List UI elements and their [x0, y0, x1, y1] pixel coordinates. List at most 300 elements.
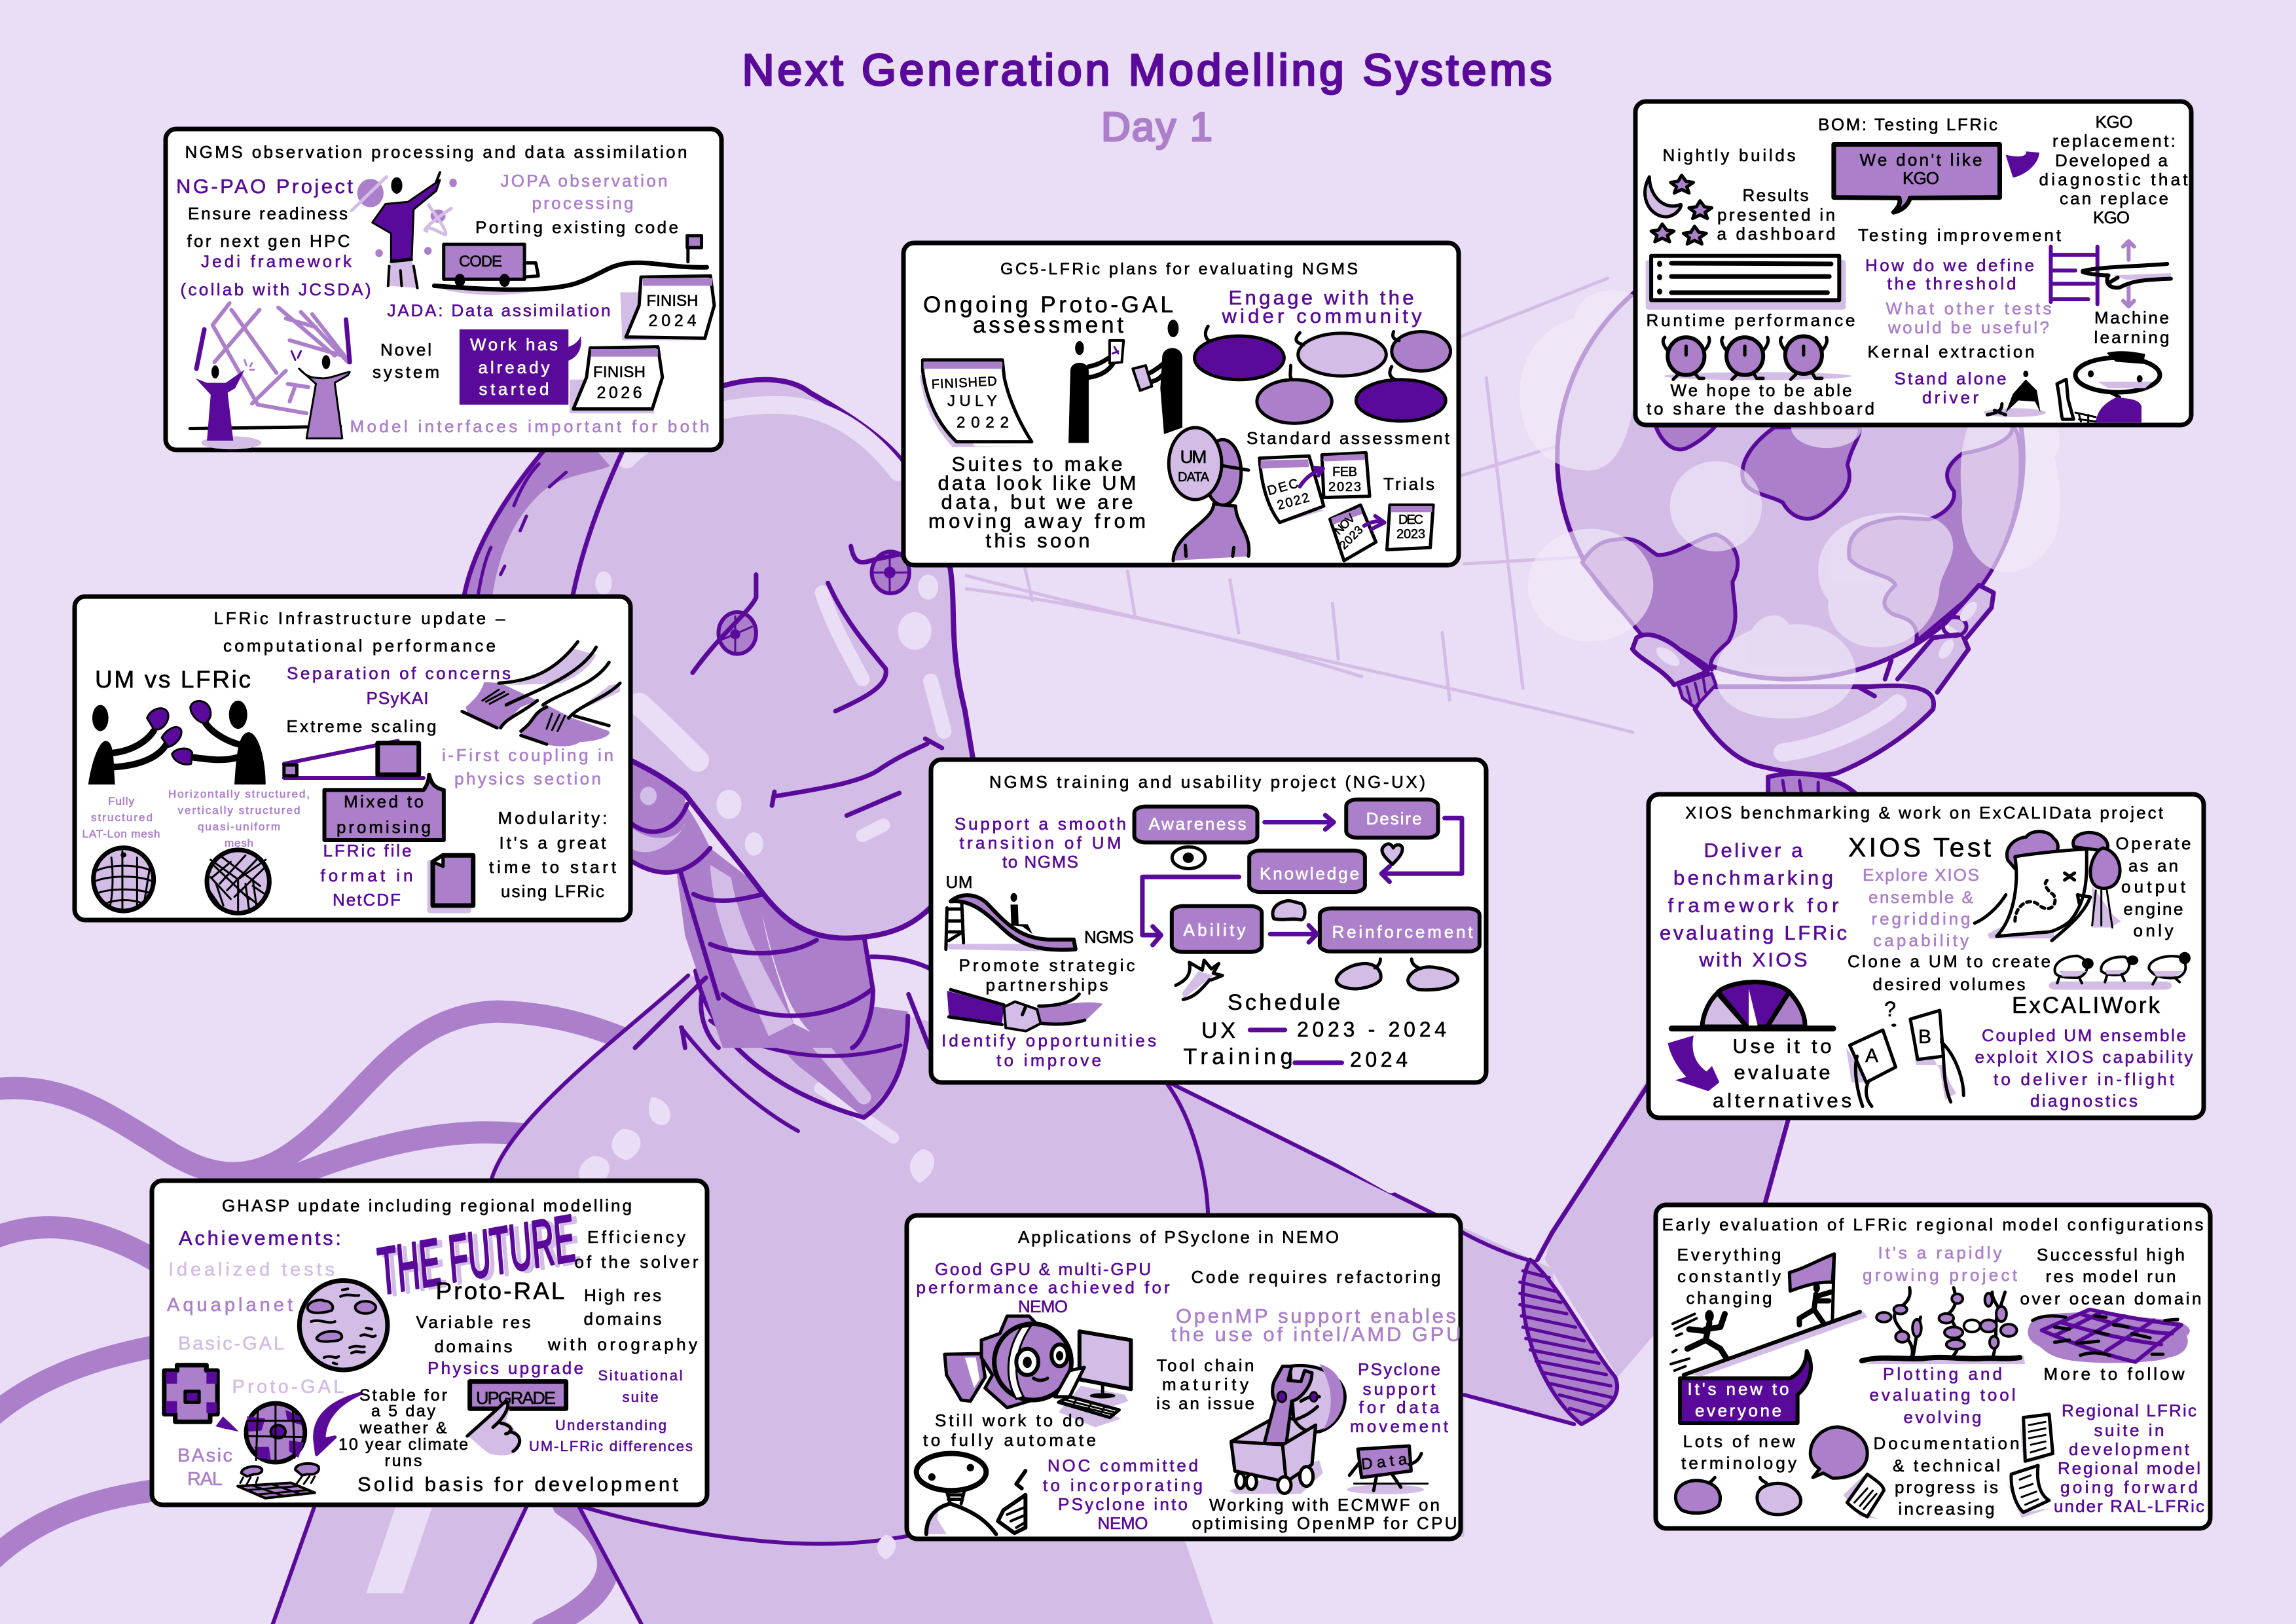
text: KGO replacement: diagnostic that [2039, 170, 2188, 189]
text: UM data mask [1178, 447, 1210, 485]
illustrations: fish, monitor, wrench, robot [917, 1316, 1428, 1534]
box: awareness [1135, 807, 1258, 843]
text: stable runs: runs [385, 1452, 422, 1470]
earth sphere [1558, 236, 2023, 679]
arrows between stages [1142, 815, 1462, 945]
text: calendar labels: 2022 [1275, 490, 1311, 513]
ear [627, 760, 710, 872]
icon: wizards [190, 320, 350, 449]
text: clone UM: Clone a UM to create [1848, 951, 2050, 971]
text: physics upgrade: Understanding [555, 1417, 666, 1433]
text: KGO replacement: KGO [2093, 208, 2130, 227]
text: successful run: res model run [2045, 1266, 2176, 1286]
text: suites [928, 452, 1146, 552]
text: calendar labels: FINISHED [931, 374, 997, 392]
text: testing improvement: the threshold [1887, 274, 2016, 293]
icon: two people [1068, 320, 1182, 443]
text: JOPA [475, 171, 678, 237]
text: new to everyone [1688, 1379, 1789, 1420]
text: achievements: Aquaplanet [167, 1295, 293, 1316]
text: stable runs [338, 1386, 468, 1470]
text: regional suite: going forward [2060, 1477, 2198, 1497]
text: output engine: Operate [2116, 834, 2191, 853]
text: upgrade button label: UPGRADE [476, 1388, 556, 1408]
text: standard assessment: Standard assessment [1247, 428, 1450, 448]
background: wavy cables [0, 1012, 703, 1624]
heading: computational performance [223, 636, 496, 655]
text: support transition [955, 814, 1126, 872]
icon: wrench and cart [1230, 1364, 1345, 1494]
text: everything changing [1677, 1245, 1781, 1308]
panel: early evaluation of regional model [1656, 1205, 2210, 1528]
text: everything changing: constantly [1677, 1266, 1781, 1286]
panel frame [166, 129, 721, 450]
text: ongoing assessment [923, 292, 1173, 338]
icon: sheep [2049, 952, 2191, 989]
text: truck and calendar labels: CODE [459, 253, 502, 270]
icon: boxing figures [88, 701, 266, 784]
text: KGO replacement: replacement: [2052, 131, 2176, 151]
text: machine learning [2094, 308, 2170, 347]
text: ECMWF: optimising OpenMP for CPU [1192, 1513, 1457, 1533]
text: modularity: Modularity: [498, 808, 608, 828]
text: documentation: & technical [1893, 1456, 2000, 1475]
text: horizontally structured mesh: vertically structured [178, 804, 300, 817]
text: NG-PAO project [176, 175, 371, 299]
panel: GHASP update [152, 1181, 707, 1505]
text: nightly builds: presented in [1717, 205, 1835, 225]
text: JOPA: JOPA observation [500, 171, 668, 191]
text: XIOS test: capability [1873, 931, 1969, 950]
text: XIOS test: ensemble & [1868, 887, 1973, 907]
callout: mixed to promising [325, 775, 444, 840]
text: output engine [2116, 834, 2191, 940]
text: card labels [1865, 997, 1931, 1067]
text: calendar labels: 2023 [1396, 527, 1425, 542]
panel frame [903, 243, 1459, 565]
icon: handshake [947, 989, 1103, 1031]
text: stable runs: Stable for [359, 1386, 447, 1405]
text: JADA and novel system: started [479, 379, 549, 399]
icon: runners on slope [1671, 1254, 1867, 1376]
text: speech bubble: We don't like [1859, 150, 1982, 170]
text: NG-PAO project: for next gen HPC [187, 231, 350, 251]
text: NOC committed [1043, 1456, 1203, 1533]
face: eyes [693, 546, 909, 673]
text: tool chain [1156, 1356, 1254, 1413]
panel: GHASP update: THE FUTURE [376, 1204, 587, 1310]
text: support transition: to NGMS [1002, 852, 1078, 872]
text: proto-RAL: domains [435, 1337, 512, 1356]
text: runtime performance: Runtime performance [1646, 310, 1855, 330]
text: successful run [2020, 1245, 2201, 1308]
text: speech bubble: KGO [1903, 168, 1939, 188]
icon: community bubbles [1195, 326, 1451, 423]
text: KGO replacement: Developed a [2055, 151, 2168, 170]
text: i-first coupling: i-First coupling in [442, 745, 613, 765]
text: file format: LFRic file [323, 841, 411, 860]
icon: trees [2007, 832, 2122, 927]
panel frame [907, 1215, 1461, 1539]
text: still work to do: to fully automate [923, 1430, 1096, 1450]
text: still work to do [923, 1411, 1096, 1450]
box: desire [1346, 800, 1438, 838]
text: growing project: growing project [1863, 1265, 2018, 1285]
text: documentation: increasing [1899, 1499, 1994, 1519]
box: reinforcement [1320, 908, 1480, 951]
text: calendar labels: JULY [947, 392, 997, 410]
text: i-first coupling [442, 745, 613, 788]
icon: ocean grid [2028, 1310, 2190, 1363]
text: stable runs: weather & [359, 1419, 447, 1437]
palm highlight [1783, 703, 1897, 752]
text: separation of concerns: PSyKAI [367, 688, 428, 708]
neck [635, 848, 932, 1048]
icon: apples [1675, 1477, 1801, 1515]
text: separation of concerns: Extreme scaling [287, 716, 436, 736]
text: engage community: wider community [1222, 304, 1422, 327]
text: data movement [1350, 1359, 1449, 1436]
text: card labels: A [1865, 1045, 1878, 1067]
text: evaluate alternatives: Use it to [1732, 1035, 1832, 1058]
panel: LFRic infrastructure update [75, 597, 630, 920]
text: modularity [489, 808, 617, 901]
text: ongoing assessment: Ongoing Proto-GAL [923, 292, 1173, 318]
text: testing improvement [1858, 225, 2062, 407]
text: schedule [1184, 990, 1446, 1071]
text: machine learning: Machine [2094, 308, 2169, 327]
icon: brain [1273, 901, 1305, 920]
text: stage labels [1148, 809, 1473, 942]
text: file format: NetCDF [333, 890, 401, 910]
text: UM data mask: DATA [1178, 470, 1210, 485]
text: new to everyone: everyone [1695, 1401, 1781, 1420]
text: GPU performance: NEMO [1018, 1297, 1068, 1316]
text: growing project [1863, 1243, 2018, 1285]
text: OpenMP support: the use of intel/AMD GPU [1171, 1323, 1461, 1346]
text: successful run: over ocean domain [2020, 1289, 2201, 1308]
text: data label: Data [1360, 1450, 1408, 1473]
text: testing improvement: Kernal extraction [1867, 342, 2035, 361]
text: output engine: output [2121, 877, 2186, 896]
text: KGO replacement [2039, 112, 2188, 227]
text: calendar labels: DEC [1398, 513, 1423, 527]
text: output engine: engine [2124, 899, 2183, 919]
wrist [1768, 774, 1858, 796]
text: runtime performance: We hope to be able [1671, 380, 1851, 400]
text: horizontally structured mesh: Horizontally structured, [168, 788, 310, 800]
icon: file [428, 855, 473, 913]
text: JOPA: processing [532, 193, 634, 213]
text: GPU performance: Good GPU & multi-GPU [935, 1259, 1151, 1279]
subtitle: Day 1 [1101, 105, 1212, 150]
text: model interfaces: Model interfaces important for both [350, 416, 710, 436]
icon: waving robot [917, 1454, 1026, 1534]
icon: hands tearing paper [462, 642, 620, 747]
text: achievements: RAL [187, 1469, 223, 1490]
text: physics upgrade [428, 1358, 693, 1454]
text: KGO replacement: can replace [2060, 189, 2168, 208]
text: successful run: Successful high [2037, 1245, 2185, 1264]
text: evaluate alternatives: evaluate [1734, 1061, 1831, 1084]
text: fully structured mesh [82, 795, 160, 840]
text: achievements: Achievements: [179, 1227, 341, 1249]
text: regional suite: Regional model [2058, 1458, 2200, 1478]
text: support transition: transition of UM [960, 833, 1121, 853]
text: truck and calendar labels: FINISH [593, 363, 646, 381]
text: tool chain: maturity [1162, 1375, 1248, 1394]
text: truck and calendar labels: FINISH [647, 292, 698, 310]
text: NG-PAO project: Ensure readiness [188, 204, 348, 223]
icon: threshold ladder and pointing hand [2050, 241, 2171, 306]
text: documentation [1874, 1433, 2019, 1519]
text: JADA and novel system: Work has [470, 335, 558, 354]
text: ECMWF [1192, 1495, 1457, 1533]
text: growing project: It's a rapidly [1878, 1243, 2002, 1263]
text: JADA and novel system [373, 301, 610, 399]
panel frame [1649, 794, 2204, 1118]
icon: astronomer [373, 172, 440, 288]
box: knowledge [1249, 851, 1365, 892]
text: separation of concerns: Separation of concerns [287, 663, 511, 683]
text: deliver benchmarking: benchmarking [1673, 866, 1833, 889]
icon: computer [1059, 1331, 1131, 1428]
text: proto-RAL [416, 1278, 697, 1356]
text: machine learning: learning [2094, 327, 2170, 347]
icon: rain clouds and grid [238, 1464, 319, 1498]
text: regional suite [2054, 1401, 2204, 1516]
text: testing improvement: driver [1922, 388, 1978, 407]
text: achievements: Idealized tests [168, 1259, 335, 1280]
text: modularity: It's a great [499, 833, 606, 853]
text: truck and calendar labels: 2024 [648, 312, 697, 330]
text: schedule: 2024 [1350, 1048, 1408, 1071]
text: physics upgrade: Physics upgrade [428, 1358, 583, 1378]
globe in hand [1520, 236, 2060, 796]
text: runtime performance: to share the dashboard [1647, 399, 1874, 418]
text: nightly builds: Nightly builds [1663, 145, 1795, 165]
text: UM vs LFRic: UM vs LFRic [95, 666, 251, 693]
text: new to everyone: It's new to [1688, 1379, 1789, 1399]
text: proto-RAL: Variable res [416, 1312, 530, 1332]
text: testing improvement: Stand alone [1895, 369, 2006, 388]
icon: calendars [570, 276, 714, 413]
text: engage community [1222, 286, 1422, 327]
text: mixed to promising: Mixed to [344, 792, 424, 811]
text: separation of concerns [287, 663, 511, 736]
text: standard assessment: Trials [1383, 474, 1434, 494]
text: NOC committed: PSyclone into [1058, 1494, 1188, 1514]
text: proto-RAL: Proto-RAL [436, 1278, 564, 1304]
heading: BOM: Testing LFRic [1818, 115, 1997, 134]
icon: cards A and B [1846, 1010, 1963, 1107]
text: calendar labels: DEC [1266, 476, 1300, 498]
callout: it's new to everyone [1680, 1351, 1811, 1423]
text: terminology: Lots of new [1683, 1431, 1795, 1451]
text: calendar labels: 2023 [1337, 523, 1366, 552]
text: ExCALIWork: ExCALIWork [2012, 993, 2160, 1018]
icon: data character [1347, 1446, 1428, 1494]
text: NOC committed: NOC committed [1048, 1456, 1198, 1475]
text: modularity: time to start [489, 857, 617, 877]
text: JADA and novel system: already [478, 358, 550, 377]
text: stable runs: a 5 day [371, 1402, 436, 1420]
text: the future [371, 1202, 587, 1310]
text: OpenMP support [1171, 1304, 1461, 1346]
text: horizontally structured mesh: quasi-uniform [198, 821, 280, 833]
text: fully structured mesh: Fully [108, 795, 135, 807]
icon: ML robot [2057, 351, 2160, 422]
continents [1582, 426, 2021, 670]
text: documentation: progress is [1895, 1477, 1998, 1497]
text: NOC committed: NEMO [1097, 1513, 1148, 1533]
panel: observation processing and data assimilation [166, 129, 721, 450]
illustrations: calendars, people, bubbles [920, 320, 1451, 561]
text: physics upgrade: Situational [598, 1367, 682, 1384]
text: deliver benchmarking: Deliver a [1704, 839, 1803, 862]
icon: kneeling person [1984, 371, 2046, 417]
panel: BOM testing LFRic [1635, 101, 2191, 425]
icon: lat-lon mesh globe [94, 848, 154, 911]
text: ExCALIWork [1975, 993, 2193, 1111]
text: plotting tool: Plotting and [1883, 1364, 2002, 1384]
text: ExCALIWork: Coupled UM ensemble [1982, 1025, 2186, 1045]
text: ECMWF: Working with ECMWF on [1209, 1495, 1440, 1515]
text: horizontally structured mesh: mesh [225, 837, 253, 849]
panel: XIOS benchmarking [1649, 794, 2204, 1118]
text: testing improvement: What other tests [1886, 299, 2052, 318]
text: efficiency [575, 1227, 699, 1272]
text: clone UM [1848, 951, 2050, 994]
text: proto-RAL: High res [584, 1285, 661, 1305]
text: file format [321, 841, 412, 910]
title: Next Generation Modelling Systems [742, 45, 1552, 95]
icon: upgrade button [467, 1382, 566, 1456]
text: XIOS test: regridding [1871, 909, 1971, 929]
heading [213, 608, 505, 655]
icon: dashboard [1646, 256, 1846, 310]
icon: aquaplanet [299, 1281, 388, 1370]
text: support transition: Support a smooth [955, 814, 1126, 834]
text: regional suite: Regional LFRic [2062, 1401, 2196, 1420]
arrow: swoosh [1668, 1035, 1719, 1091]
icon: growing plants [1862, 1288, 2025, 1364]
text: horizontally structured mesh [168, 788, 310, 849]
heading: Applications of PSyclone in NEMO [1018, 1227, 1339, 1247]
robot: legs and body [271, 976, 1574, 1624]
text: JOPA: Porting existing code [475, 217, 678, 237]
text: evaluate alternatives [1713, 1035, 1851, 1112]
text: plotting tool [1870, 1364, 2015, 1427]
text: achievements [167, 1227, 344, 1490]
text: stable runs: 10 year climate [338, 1435, 468, 1454]
heading: NGMS observation processing and data assimilation [185, 142, 687, 162]
palm [1695, 686, 1934, 775]
text: GPU performance: performance achieved for [917, 1278, 1170, 1297]
text: testing improvement: How do we define [1865, 255, 2034, 275]
heading: LFRic Infrastructure update – [213, 608, 505, 628]
icon: gauge [1671, 982, 1833, 1029]
panel: NG-UX training and usability [931, 760, 1486, 1082]
text: tool chain: Tool chain [1156, 1356, 1254, 1375]
text: documentation: Documentation [1874, 1433, 2019, 1453]
illustrations: runners, plants, grid, documents [1671, 1254, 2190, 1519]
text: data movement: support [1363, 1379, 1436, 1399]
text: partnerships [941, 955, 1156, 1070]
text: deliver benchmarking [1660, 839, 1847, 971]
text: stage labels: Desire [1366, 809, 1422, 828]
icon: mesh grid [213, 303, 348, 413]
text: calendar labels [931, 374, 1425, 552]
text: deliver benchmarking: with XIOS [1698, 948, 1807, 971]
panel: PSyclone in NEMO [907, 1215, 1461, 1539]
text: data movement: movement [1350, 1416, 1449, 1436]
icon: speech blob [1810, 1427, 1867, 1478]
text: stage labels: Knowledge [1260, 864, 1359, 883]
text: schedule: UX [1201, 1018, 1235, 1043]
text: mixed to promising [337, 792, 431, 837]
text: OpenMP support: OpenMP support enables [1176, 1304, 1456, 1327]
icon: code truck [434, 236, 707, 295]
text: the future: THE FUTURE [371, 1202, 581, 1308]
text: terminology [1681, 1431, 1796, 1473]
text: NG-PAO project: Jedi framework [201, 251, 352, 271]
head shape [572, 380, 974, 938]
text: proto-RAL: with orography [547, 1335, 697, 1354]
illustrations: speech, stars, dashboard, clocks [1645, 144, 2171, 422]
text: terminology: terminology [1681, 1453, 1796, 1473]
panel: GC5-LFRic plans [903, 243, 1459, 565]
text: proto-RAL: domains [584, 1309, 661, 1329]
text: ongoing assessment: assessment [973, 312, 1123, 338]
text: data movement: for data [1359, 1397, 1440, 1417]
text: testing improvement: Testing improvement [1858, 225, 2062, 245]
icon: trial calendars [1260, 452, 1433, 561]
text: GPU performance [917, 1259, 1170, 1316]
text: speech bubble [1859, 150, 1982, 188]
text: code refactoring: Code requires refactoring [1192, 1267, 1440, 1287]
text: partnerships: partnerships [986, 975, 1108, 995]
icon: treasure map [1975, 849, 2090, 940]
text: tool chain: is an issue [1156, 1393, 1254, 1413]
panel frame [1656, 1205, 2210, 1528]
text: plotting tool: evaluating tool [1870, 1385, 2015, 1405]
text: fully structured mesh: structured [91, 811, 153, 824]
text: partnerships: to improve [996, 1050, 1101, 1070]
text: physics upgrade: suite [622, 1389, 659, 1405]
text: engage community: Engage with the [1228, 286, 1414, 309]
text: suites: Suites to make [952, 452, 1122, 475]
clouds [1520, 290, 2060, 718]
callout: work has already started [460, 329, 581, 405]
callout: we don't like KGO [1834, 144, 1999, 212]
text: KGO replacement: KGO [2095, 112, 2133, 132]
text: slide labels [945, 872, 1134, 947]
text: ExCALIWork: diagnostics [2030, 1091, 2138, 1111]
text: regional suite: under RAL-LFRic [2054, 1496, 2204, 1516]
icon: finished calendar [920, 360, 1032, 447]
heading: GHASP update including regional modelling [222, 1196, 632, 1215]
text: NG-PAO project: NG-PAO Project [176, 175, 353, 198]
text: stage labels: Reinforcement [1332, 922, 1473, 942]
text: efficiency: of the solver [575, 1252, 699, 1272]
text: schedule: 2023 - 2024 [1297, 1018, 1446, 1041]
text: JADA and novel system: JADA: Data assimilation [388, 301, 610, 320]
text: deliver benchmarking: evaluating LFRic [1660, 921, 1847, 944]
icon: eye [1172, 847, 1205, 868]
text: ExCALIWork: to deliver in-flight [1994, 1069, 2175, 1089]
text: plotting tool: evolving [1904, 1407, 1981, 1427]
